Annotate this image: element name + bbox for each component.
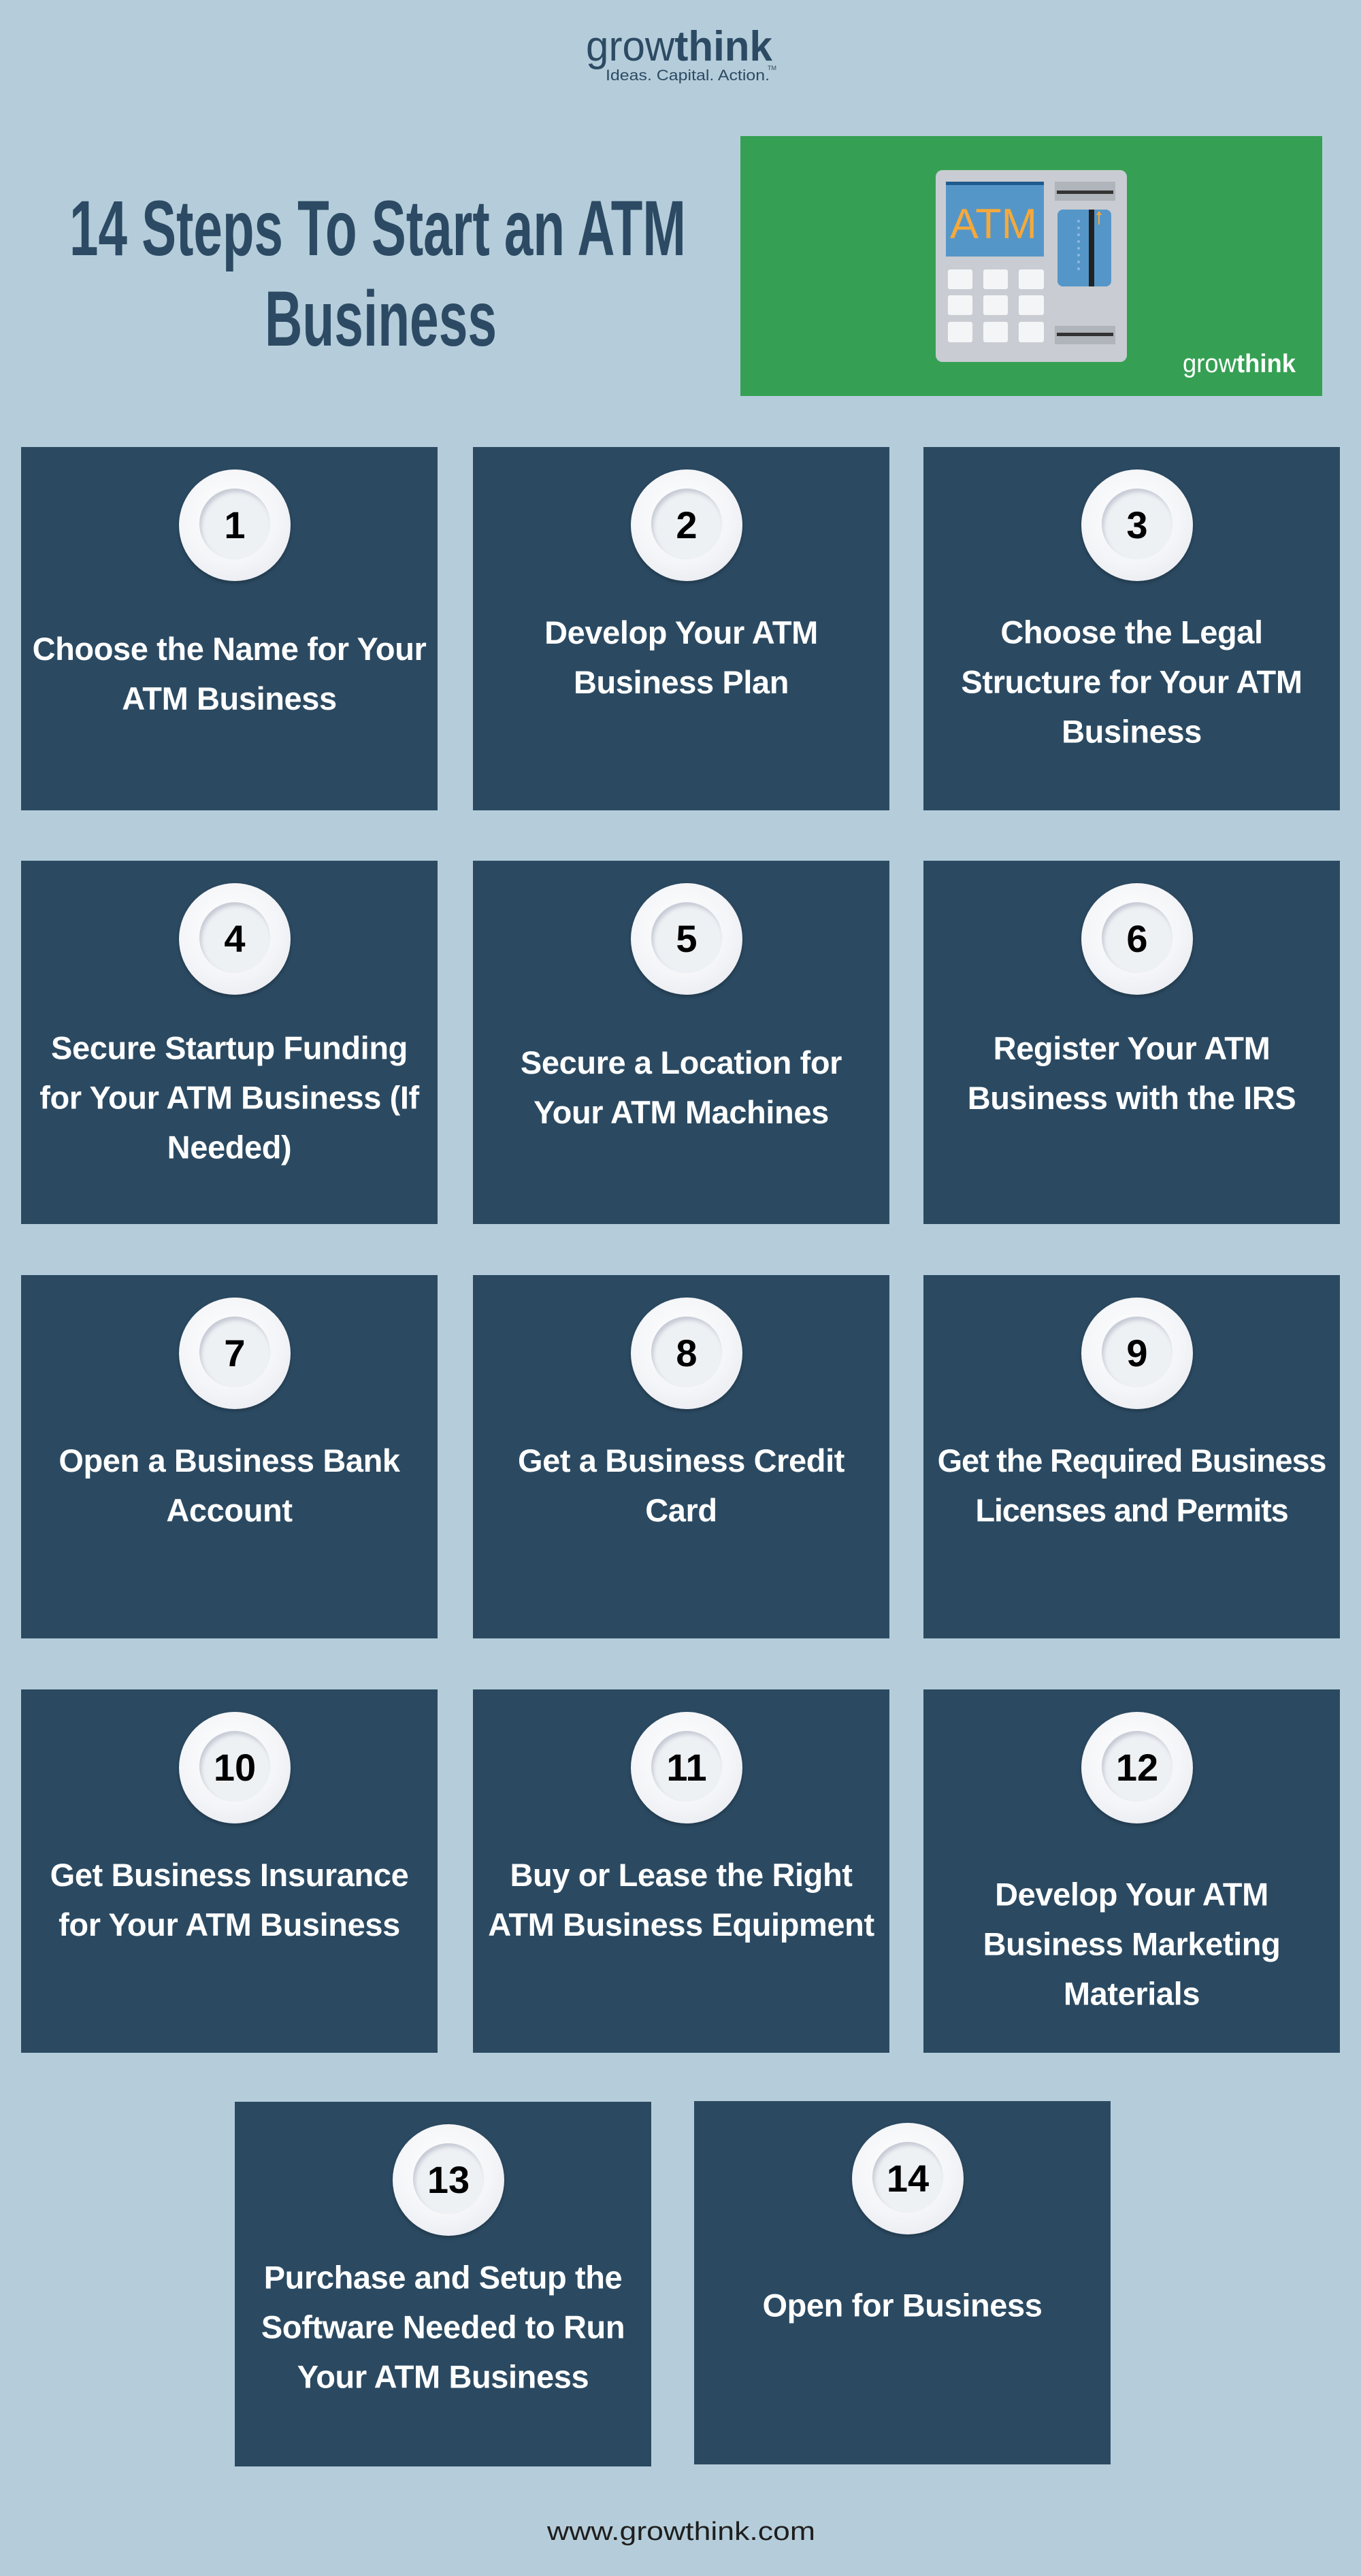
step card 1	[21, 447, 438, 810]
step card 8	[473, 1275, 889, 1638]
step card 10	[21, 1689, 438, 2053]
number badge 8: 8	[676, 1332, 698, 1374]
number badge 6	[1081, 883, 1193, 995]
logo: TM	[768, 65, 776, 71]
number badge 6: 6	[1126, 917, 1148, 960]
step text 2: Business Plan	[574, 664, 789, 700]
step text 12: Develop Your ATM	[995, 1877, 1268, 1912]
step text 6: Register Your ATM	[994, 1030, 1270, 1066]
step text 13: Software Needed to Run	[261, 2309, 625, 2345]
step text 3: Business	[1062, 713, 1202, 750]
step card 12	[923, 1689, 1340, 2053]
step text 2	[544, 614, 818, 700]
step card 7	[21, 1275, 438, 1638]
number badge 7	[179, 1298, 291, 1409]
number badge 14	[852, 2123, 964, 2234]
step text 4: for Your ATM Business (If	[39, 1079, 419, 1116]
step text 7: Open a Business Bank	[59, 1442, 400, 1479]
step text 10: Get Business Insurance	[50, 1857, 408, 1893]
number badge 4: 4	[224, 917, 246, 960]
step text 6: Business with the IRS	[968, 1080, 1296, 1116]
number badge 11: 11	[666, 1746, 707, 1789]
number badge 12	[1081, 1712, 1193, 1823]
step text 14: Open for Business	[762, 2288, 1043, 2323]
image panel: ATM illustration	[740, 136, 1322, 396]
step text 11: ATM Business Equipment	[488, 1906, 874, 1943]
step text 8: Get a Business Credit	[518, 1442, 845, 1479]
step text 8	[518, 1442, 845, 1528]
step text 7	[59, 1442, 400, 1528]
step text 1	[33, 631, 426, 716]
step text 1: Choose the Name for Your	[33, 631, 426, 667]
number badge 1: 1	[224, 503, 246, 546]
step text 11: Buy or Lease the Right	[510, 1857, 853, 1893]
number badge 9: 9	[1126, 1332, 1148, 1374]
step text 11	[488, 1857, 874, 1943]
panel logo: growthink	[1183, 350, 1296, 378]
step text 10	[50, 1857, 408, 1943]
number badge 3	[1081, 469, 1193, 581]
step text 13	[261, 2259, 625, 2395]
footer url: www.growthink.com	[546, 2517, 815, 2546]
title	[69, 185, 686, 363]
logo: Ideas. Capital. Action.	[606, 67, 770, 84]
step card 13	[235, 2102, 651, 2466]
step card 2	[473, 447, 889, 810]
number badge 12: 12	[1116, 1746, 1158, 1789]
step text 12: Materials	[1064, 1976, 1200, 2011]
number badge 11	[631, 1712, 742, 1823]
step text 4: Secure Startup Funding	[51, 1030, 408, 1066]
step text 13: Your ATM Business	[297, 2358, 589, 2395]
title: 14 Steps To Start an ATM	[69, 185, 686, 272]
number badge 13	[393, 2124, 504, 2236]
step text 8: Card	[645, 1492, 717, 1528]
number badge 2: 2	[676, 503, 698, 546]
step card 5	[473, 861, 889, 1224]
step text 10: for Your ATM Business	[59, 1906, 400, 1943]
step text 1: ATM Business	[122, 680, 337, 716]
icon: ATM machine: ATM	[950, 201, 1037, 248]
step card 4	[21, 861, 438, 1224]
step card 9	[923, 1275, 1340, 1638]
logo: growthink	[586, 23, 772, 70]
number badge 14: 14	[887, 2157, 929, 2200]
step text 4	[39, 1030, 419, 1165]
number badge 7: 7	[224, 1332, 246, 1374]
step text 13: Purchase and Setup the	[264, 2259, 622, 2296]
step text 5: Secure a Location for	[521, 1044, 842, 1080]
icon: ATM machine	[936, 170, 1127, 362]
step card 3	[923, 447, 1340, 810]
number badge 5	[631, 883, 742, 995]
step card 14	[694, 2101, 1111, 2464]
step text 3: Choose the Legal	[1000, 614, 1263, 650]
step text 7: Account	[166, 1492, 293, 1528]
step text 9	[938, 1442, 1326, 1528]
number badge 9	[1081, 1298, 1193, 1409]
number badge 8	[631, 1298, 742, 1409]
number badge 10: 10	[214, 1746, 256, 1789]
step text 5	[521, 1044, 842, 1130]
number badge 10	[179, 1712, 291, 1823]
header	[69, 23, 1322, 396]
step text 6	[968, 1030, 1296, 1116]
step text 3: Structure for Your ATM	[961, 664, 1302, 699]
step text 3	[961, 614, 1302, 750]
number badge 2	[631, 469, 742, 581]
step text 12: Business Marketing	[983, 1926, 1280, 1962]
step card 6	[923, 861, 1340, 1224]
title: Business	[265, 276, 497, 363]
number badge 4	[179, 883, 291, 995]
step text 12	[983, 1877, 1280, 2011]
number badge 13: 13	[427, 2158, 470, 2201]
step text 9: Licenses and Permits	[975, 1492, 1288, 1528]
step text 4: Needed)	[167, 1129, 291, 1165]
step text 9: Get the Required Business	[938, 1442, 1326, 1479]
number badge 5: 5	[676, 917, 698, 960]
number badge 1	[179, 469, 291, 581]
number badge 3: 3	[1126, 503, 1148, 546]
step text 5: Your ATM Machines	[534, 1094, 829, 1130]
step text 2: Develop Your ATM	[544, 614, 818, 650]
step card 11	[473, 1689, 889, 2053]
